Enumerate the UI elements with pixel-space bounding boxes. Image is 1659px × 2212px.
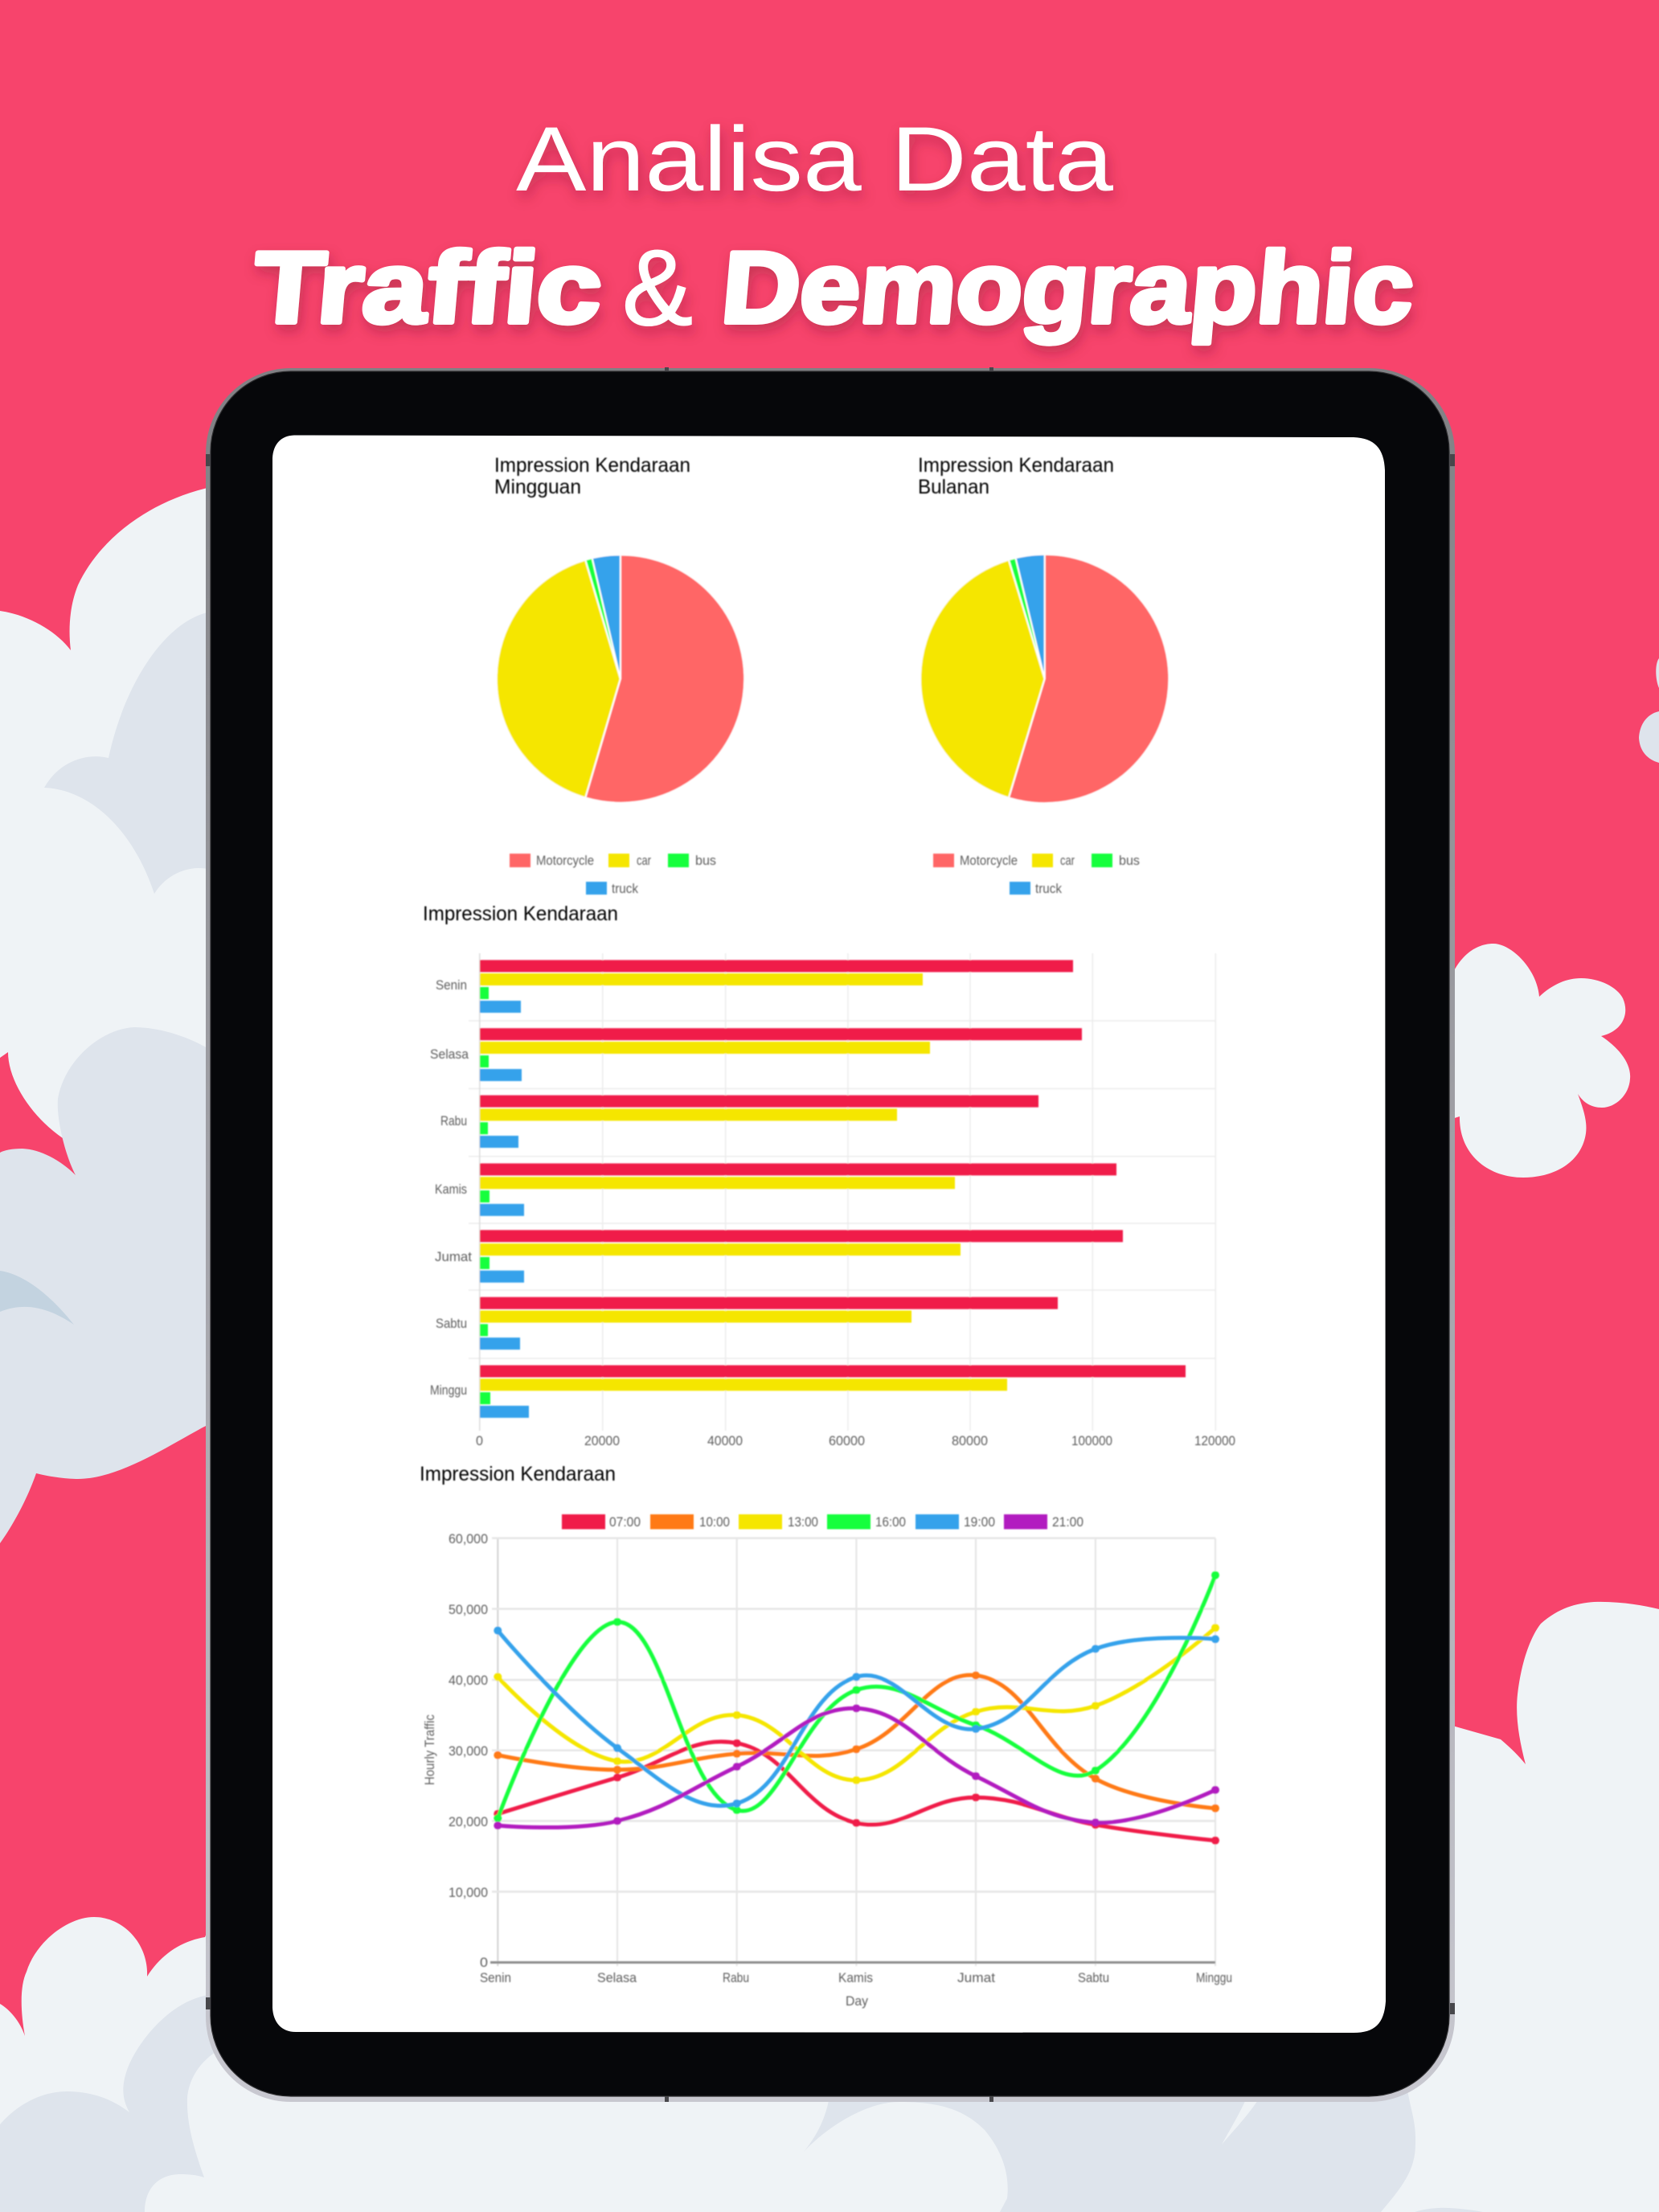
y axis labels: 50,000 [449,1602,488,1617]
tablet notches [206,367,1455,2102]
left cloud group [0,488,241,1543]
title line 1: Analisa Data [516,109,1114,211]
bar chart y labels: Selasa [430,1047,469,1062]
bars: Sabtu [480,1297,1058,1350]
bar chart y labels: Minggu [430,1382,467,1398]
line: 13:00 [494,1624,1219,1784]
cloud: bottom light [0,1602,1659,2212]
bar chart y labels: Kamis [435,1182,467,1197]
line chart legend [562,1514,1083,1530]
heading: bar chart: Impression Kendaraan [423,903,618,925]
bar chart x labels: 40000 [707,1433,743,1448]
bottom cloud group [0,1602,1659,2212]
x axis labels: Minggu [1196,1970,1232,1985]
title line 2: demographic: Demographic [718,231,1419,344]
heading: weekly pie: Impression Kendaraan [494,454,690,477]
heading: monthly pie: Impression Kendaraan [918,454,1114,477]
y axis labels: 40,000 [449,1673,488,1688]
bars: Rabu [480,1096,1038,1148]
bars: Minggu [480,1365,1186,1418]
pie chart: monthly [920,555,1169,803]
heading: line chart: Impression Kendaraan [420,1463,616,1485]
cloud: left light [0,488,241,1206]
screen [272,436,1386,2033]
bar chart x labels [476,1433,1235,1448]
line: 19:00 [494,1627,1219,1808]
x axis labels: Rabu [723,1970,749,1985]
bar chart x labels: 0 [476,1433,483,1448]
bar chart x labels: 80000 [952,1433,988,1448]
bars: Selasa [480,1028,1082,1081]
right cloud group [1447,658,1659,1178]
pie chart: weekly [497,555,744,803]
legend: monthly pie: Motorcycle [960,853,1018,868]
cloud: bottom centre wedge [1222,2094,1262,2144]
cloud: left sliver [0,1271,74,1325]
heading: monthly pie: Bulanan [918,476,989,498]
line: 21:00 [494,1704,1219,1829]
bar chart y labels [430,977,472,1398]
line chart legend: 07:00 [609,1514,641,1530]
legend: weekly pie [510,853,716,896]
legend: weekly pie: bus [695,853,716,868]
y axis labels: 60,000 [449,1531,488,1546]
x axis labels: Selasa [597,1970,637,1985]
x axis labels: Sabtu [1078,1970,1109,1985]
bar chart x labels: 60000 [829,1433,865,1448]
cloud: left lower [0,1027,207,1543]
bars: Senin [480,960,1073,1013]
line: 07:00 [494,1739,1219,1845]
legend: weekly pie: Motorcycle [536,853,594,868]
bar chart y labels: Rabu [440,1113,467,1129]
bar chart x labels: 100000 [1071,1433,1112,1448]
panel: bar chart [423,903,1235,1448]
cloud: left inner shade [44,612,207,894]
tablet [206,367,1455,2102]
panel: weekly pie [494,454,744,896]
x axis labels: Kamis [838,1970,873,1985]
x axis title: Day [846,1993,868,2009]
title line 2: traffic: Traffic [249,231,607,344]
y axis labels: 20,000 [449,1814,488,1829]
bar chart y labels: Senin [436,977,467,993]
y axis labels [449,1531,488,1970]
legend: monthly pie: bus [1119,853,1140,868]
line: 16:00 [494,1571,1219,1822]
x axis labels [480,1970,1232,1985]
dashboard charts [420,454,1235,2009]
tablet bezel [211,371,1449,2096]
legend: monthly pie: car [1060,853,1075,868]
y axis labels: 30,000 [449,1743,488,1759]
y axis labels: 0 [480,1955,488,1970]
y axis title: Hourly Traffic [422,1714,437,1785]
legend: weekly pie: truck [612,881,638,896]
cloud: right edge [1639,658,1659,763]
legend: weekly pie: car [637,853,651,868]
line chart legend: 21:00 [1052,1514,1083,1530]
heading: weekly pie: Mingguan [494,476,581,498]
title [249,109,1419,348]
line chart legend: 19:00 [964,1514,995,1530]
bar chart x labels: 120000 [1194,1433,1235,1448]
bars: Jumat [480,1230,1123,1283]
x axis labels: Jumat [957,1970,995,1985]
tablet frame [206,368,1455,2102]
cloud: bottom left shade [0,1993,241,2212]
cloud: bottom centre shade [804,2090,1415,2212]
line: 10:00 [494,1671,1219,1813]
bar chart x labels: 20000 [584,1433,620,1448]
line chart legend: 10:00 [699,1514,730,1530]
cloud: right small [1447,944,1630,1178]
heading: weekly pie [494,454,690,498]
line chart legend: 16:00 [875,1514,906,1530]
bar chart y labels: Jumat [435,1249,472,1264]
legend: monthly pie: truck [1035,881,1062,896]
cloud: bottom right lobe [1415,2208,1483,2212]
x axis labels: Senin [480,1970,511,1985]
bars: Kamis [480,1163,1116,1216]
line chart legend: 13:00 [788,1514,818,1530]
title line 2: ampersand: & [622,228,693,348]
panel: monthly pie [918,454,1169,896]
panel: line chart [420,1463,1232,2009]
bar chart y labels: Sabtu [436,1316,467,1331]
y axis labels: 10,000 [449,1885,488,1900]
heading: monthly pie [918,454,1114,498]
legend: monthly pie [933,853,1140,896]
